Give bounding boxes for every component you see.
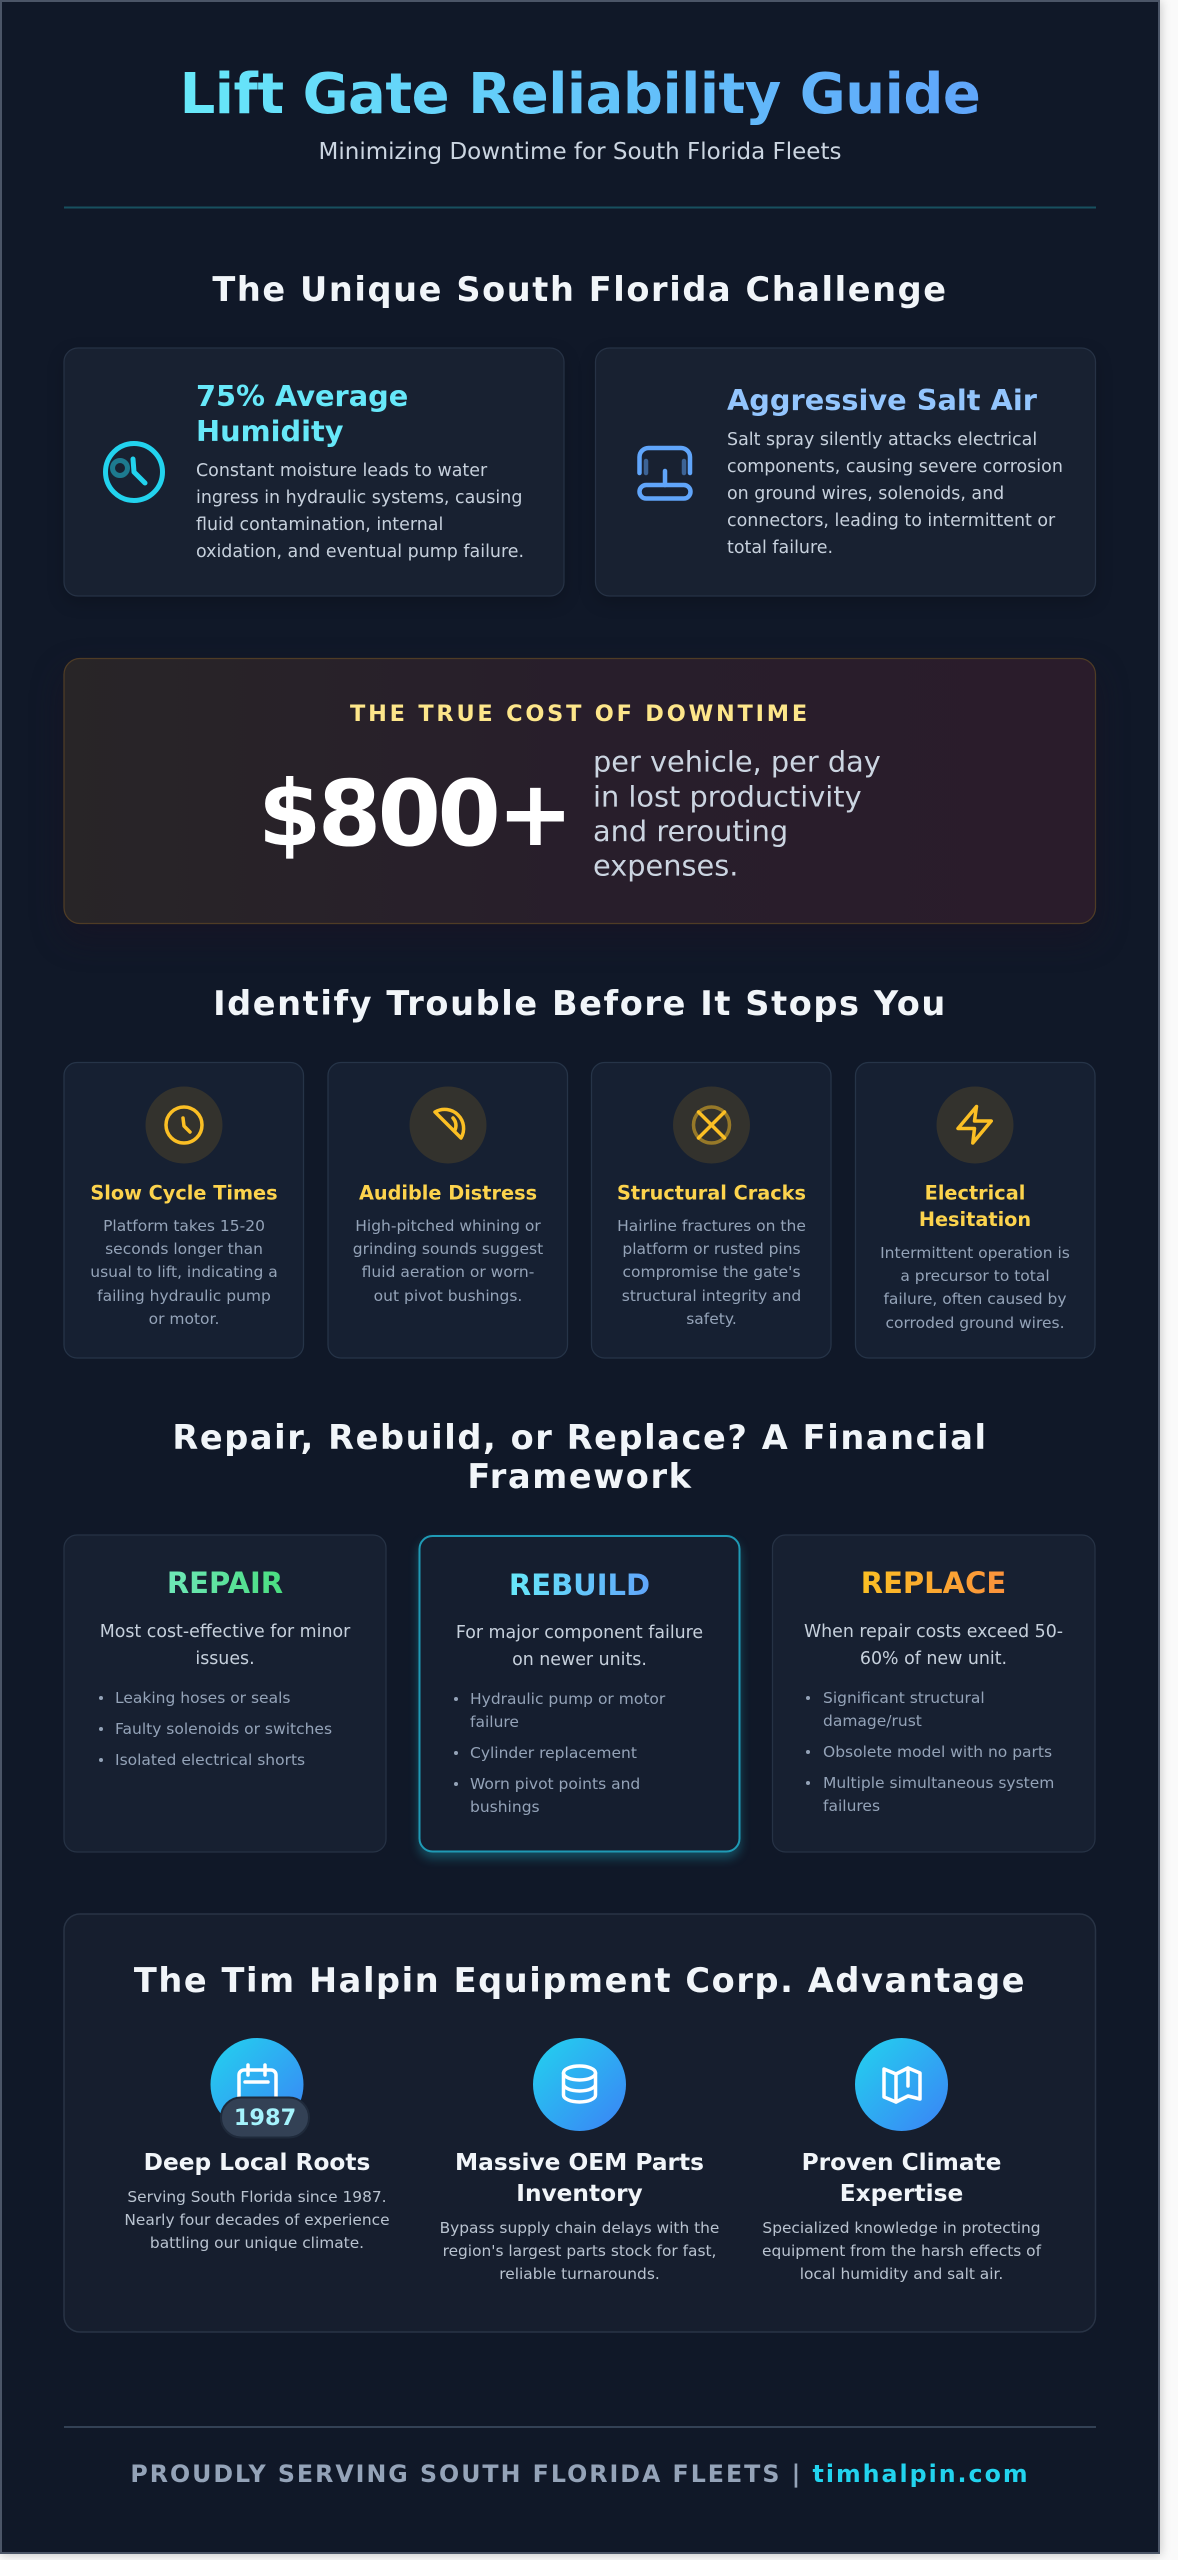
symptom description: Intermittent operation is (880, 1244, 1070, 1262)
symptom description: a precursor to total (900, 1267, 1050, 1285)
advantage: parts inventory (440, 2038, 719, 2283)
panel: rebuild (420, 1536, 740, 1852)
callout description: and rerouting (593, 814, 788, 848)
symptom title: Audible Distress (359, 1182, 537, 1204)
panel: audible distress (328, 1062, 568, 1358)
icon: humidity gauge (106, 444, 162, 500)
repair list: Faulty solenoids or switches (115, 1720, 332, 1738)
advantage heading: The Tim Halpin Equipment Corp. Advantage (134, 1961, 1026, 2000)
replace list: Multiple simultaneous system (823, 1774, 1054, 1792)
symptom description: fluid aeration or worn- (362, 1263, 534, 1281)
symptom title: Slow Cycle Times (90, 1182, 278, 1204)
advantage description: region's largest parts stock for fast, (443, 2242, 716, 2260)
header (180, 62, 980, 165)
rebuild list: Cylinder replacement (470, 1744, 637, 1762)
repair list: Isolated electrical shorts (115, 1751, 305, 1769)
panel: electrical hesitation (856, 1062, 1095, 1358)
callout: cost of downtime (64, 658, 1096, 924)
advantage description: reliable turnarounds. (499, 2265, 660, 2283)
advantage description: Bypass supply chain delays with the (440, 2219, 719, 2237)
symptom description: failing hydraulic pump (97, 1287, 271, 1305)
subtitle: Minimizing Downtime for South Florida Fleets (319, 139, 841, 165)
symptom description: platform or rusted pins (622, 1240, 801, 1258)
icon: map (855, 2038, 948, 2131)
humidity heading: Humidity (196, 414, 344, 448)
heading: repair rebuild replace: Repair, Rebuild, or Replace? A Financial (172, 1418, 988, 1457)
advantage title: Deep Local Roots (144, 2149, 370, 2176)
advantage description: Nearly four decades of experience (124, 2211, 390, 2229)
symptom description: corroded ground wires. (885, 1314, 1065, 1332)
humidity description: Constant moisture leads to water (196, 461, 488, 481)
advantage description: battling our unique climate. (150, 2234, 364, 2252)
repair list (99, 1689, 332, 1769)
symptom description: seconds longer than (105, 1240, 263, 1258)
humidity description: oxidation, and eventual pump failure. (196, 542, 524, 562)
icon: salt air corrosion (640, 448, 690, 498)
icon: calendar with 1987 badge (210, 2038, 309, 2138)
icon: database (533, 2038, 626, 2131)
symptom title: Electrical (925, 1182, 1025, 1204)
advantage description: equipment from the harsh effects of (762, 2242, 1042, 2260)
symptom description: safety. (686, 1310, 737, 1328)
advantage description: Serving South Florida since 1987. (127, 2188, 387, 2206)
heading: identify trouble: Identify Trouble Before It Stops You (213, 984, 947, 1023)
big number: $800+ (258, 762, 570, 867)
replace list: Obsolete model with no parts (823, 1743, 1052, 1761)
salt air description: components, causing severe corrosion (727, 457, 1063, 477)
callout description: in lost productivity (593, 780, 862, 814)
symptom title: Hesitation (919, 1208, 1031, 1231)
icon: calendar with 1987 badge: 1987 (234, 2105, 296, 2131)
rebuild description: For major component failure (456, 1623, 703, 1643)
advantage description: Specialized knowledge in protecting (762, 2219, 1041, 2237)
symptom description: usual to lift, indicating a (90, 1263, 278, 1281)
advantage: climate expertise (762, 2038, 1042, 2283)
repair description: issues. (195, 1649, 255, 1669)
symptom description: High-pitched whining or (355, 1217, 541, 1235)
rebuild list: Hydraulic pump or motor (470, 1690, 666, 1708)
rebuild list (454, 1690, 666, 1816)
symptom description: failure, often caused by (883, 1290, 1067, 1308)
rebuild list: failure (470, 1713, 519, 1731)
replace list: failures (823, 1797, 880, 1815)
callout description: per vehicle, per day (593, 744, 881, 778)
replace heading: REPLACE (861, 1566, 1006, 1600)
icon: speaker arc (410, 1086, 486, 1164)
panel: slow cycle times (64, 1062, 304, 1358)
panel: structural cracks (592, 1062, 831, 1358)
replace list: damage/rust (823, 1712, 922, 1730)
icon: lightning bolt (936, 1086, 1014, 1164)
advantage title: Massive OEM Parts (455, 2149, 704, 2176)
salt air description: Salt spray silently attacks electrical (727, 430, 1037, 450)
footer: PROUDLY SERVING SOUTH FLORIDA FLEETS | timhalpin.com (130, 2460, 1030, 2488)
callout heading: THE TRUE COST OF DOWNTIME (350, 701, 810, 727)
icon: crossed circle (673, 1086, 750, 1164)
advantage description: local humidity and salt air. (800, 2265, 1003, 2283)
title: Lift Gate Reliability Guide (180, 62, 980, 127)
symptom description: compromise the gate's (622, 1263, 801, 1281)
symptom description: grinding sounds suggest (353, 1240, 543, 1258)
heading: the unique south florida challenge: The Unique South Florida Challenge (212, 270, 948, 309)
salt air description: total failure. (727, 538, 833, 558)
panel: humidity (64, 348, 564, 596)
symptom description: Hairline fractures on the (617, 1217, 806, 1235)
salt air heading: Aggressive Salt Air (727, 383, 1038, 417)
rebuild list: bushings (470, 1798, 540, 1816)
humidity description: ingress in hydraulic systems, causing (196, 488, 522, 508)
panel: replace (772, 1535, 1095, 1852)
advantage title: Expertise (840, 2180, 963, 2207)
advantage title: Inventory (516, 2180, 643, 2207)
panel: tim halpin advantage (64, 1914, 1096, 2332)
replace description: 60% of new unit. (860, 1649, 1007, 1669)
symptom description: structural integrity and (622, 1287, 801, 1305)
symptom description: out pivot bushings. (374, 1287, 522, 1305)
salt air description: connectors, leading to intermittent or (727, 511, 1056, 531)
repair list: Leaking hoses or seals (115, 1689, 290, 1707)
repair description: Most cost-effective for minor (100, 1622, 351, 1642)
heading: repair rebuild replace: Framework (467, 1457, 693, 1496)
humidity heading: 75% Average (196, 379, 408, 413)
salt air description: on ground wires, solenoids, and (727, 484, 1004, 504)
panel: repair (64, 1535, 386, 1852)
replace description: When repair costs exceed 50- (804, 1622, 1063, 1642)
icon: clock (146, 1086, 222, 1164)
replace list: Significant structural (823, 1689, 985, 1707)
rebuild list: Worn pivot points and (470, 1775, 640, 1793)
repair heading: REPAIR (167, 1566, 283, 1600)
rebuild description: on newer units. (512, 1650, 647, 1670)
symptom title: Structural Cracks (617, 1182, 806, 1204)
advantage title: Proven Climate (802, 2149, 1001, 2176)
replace list (806, 1689, 1054, 1815)
callout description: expenses. (593, 848, 738, 882)
panel: salt air (596, 348, 1096, 596)
rebuild heading: REBUILD (509, 1568, 650, 1602)
humidity description: fluid contamination, internal (196, 515, 443, 535)
symptom description: Platform takes 15-20 (103, 1217, 265, 1235)
advantage: deep local roots (124, 2038, 390, 2252)
symptom description: or motor. (149, 1310, 219, 1328)
